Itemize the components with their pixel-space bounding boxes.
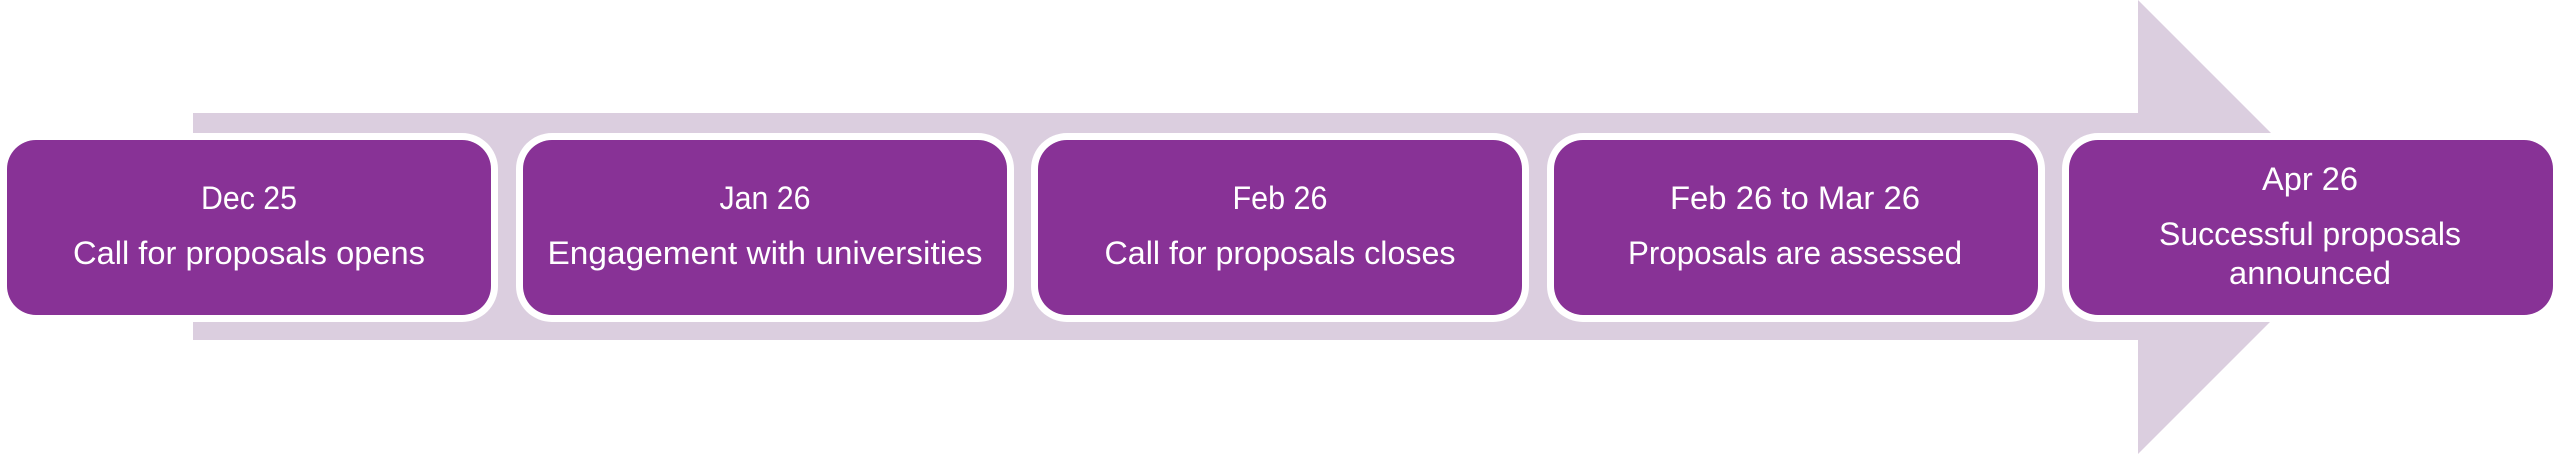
panel: Apr 26 — [2062, 133, 2560, 322]
date: Feb 26 to Mar 26: Feb 26 to Mar 26 — [1670, 180, 1920, 216]
description: announced: Successful proposals — [2159, 216, 2461, 252]
description: announced — [2159, 216, 2461, 291]
panel: Dec 25 — [0, 133, 498, 322]
date: Jan 26: Jan 26 — [720, 180, 810, 216]
description: call closes: Call for proposals closes — [1104, 235, 1456, 271]
panel: Jan 26 — [516, 133, 1014, 322]
description: announced: announced — [2229, 255, 2391, 291]
date: Apr 26: Apr 26 — [2262, 161, 2358, 197]
date: Feb 26: Feb 26 — [1232, 180, 1328, 216]
description: engagement: Engagement with universities — [548, 235, 982, 271]
panel: Feb 26 to Mar 26 — [1547, 133, 2045, 322]
panel: Feb 26 — [1031, 133, 1529, 322]
date: Dec 25: Dec 25 — [201, 180, 297, 216]
description: call opens: Call for proposals opens — [73, 235, 425, 271]
description: assessed: Proposals are assessed — [1628, 235, 1962, 271]
